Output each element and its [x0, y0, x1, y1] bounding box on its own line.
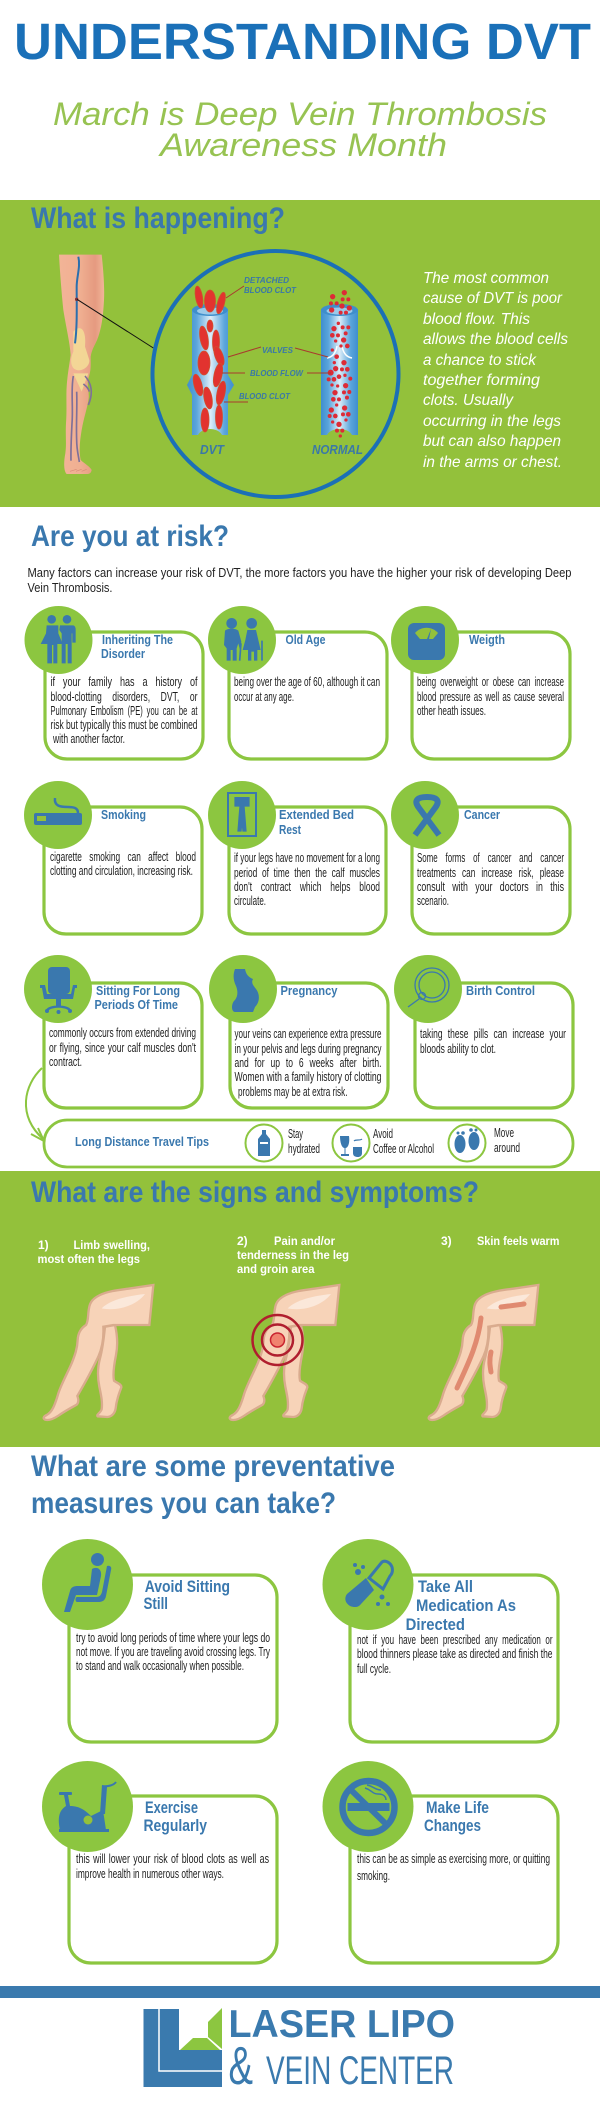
body text: smoking. — [357, 1869, 390, 1883]
icon: pill pack — [408, 968, 449, 1007]
card: birth control — [394, 955, 573, 1108]
body text: full cycle. — [357, 1662, 391, 1676]
body text: occur at any age. — [234, 690, 294, 704]
tip: move around: Move — [494, 1126, 514, 1140]
body text — [234, 851, 380, 908]
tip: move around — [448, 1124, 520, 1162]
body text: in your pelvis and legs during pregnancy — [234, 1042, 382, 1056]
body text: to stand and walk occasionally when possible. — [76, 1659, 244, 1673]
card: extended bed rest — [208, 781, 386, 934]
title: UNDERSTANDING DVT — [14, 13, 591, 70]
body text: Women with a family history of clotting — [234, 1070, 382, 1084]
explanation text: clots. Usually — [423, 392, 514, 409]
symptom 1 label: 1) — [38, 1238, 49, 1252]
arrow: curve to travel tips — [26, 1068, 44, 1141]
body text: bloods ability to clot. — [420, 1042, 496, 1056]
title: Still — [144, 1594, 168, 1613]
tip: stay hydrated — [246, 1124, 320, 1162]
symptom 1 label: most often the legs — [38, 1252, 140, 1266]
body text: being over the age of 60, although it can — [234, 675, 380, 689]
body text: risk but typically this must be combined — [50, 718, 198, 732]
icon: bed rest — [228, 793, 256, 836]
symptom 1 label: Limb swelling, — [74, 1238, 150, 1252]
body text — [417, 675, 564, 718]
title: Take All — [418, 1577, 473, 1596]
vein: DVT — [187, 286, 234, 435]
logo text — [228, 2003, 455, 2096]
body text: your veins can experience extra pressure — [234, 1027, 382, 1041]
title — [424, 1798, 489, 1835]
title: Old Age — [286, 632, 326, 647]
diagram labels: NORMAL — [312, 442, 363, 457]
title: Sitting For Long — [96, 983, 180, 998]
illustration: swollen leg — [44, 1285, 153, 1420]
title: Changes — [424, 1816, 481, 1835]
diagram labels — [200, 275, 363, 457]
icon: couple — [41, 615, 76, 663]
symptom 3 label: 3) — [441, 1234, 452, 1248]
card: make life changes — [322, 1761, 558, 1963]
body text — [76, 1852, 269, 1881]
title: Rest — [279, 822, 302, 837]
body text — [357, 1633, 553, 1676]
body text: improve health in numerous other ways. — [76, 1867, 224, 1881]
logo text: & — [228, 2036, 253, 2096]
diagram labels: DVT — [200, 442, 225, 457]
card: pregnancy — [209, 955, 388, 1108]
explanation text: allows the blood cells — [423, 331, 568, 348]
title: Extended Bed — [279, 807, 354, 822]
title — [144, 1577, 230, 1613]
heading: preventative measures: What are some preventative — [31, 1450, 395, 1483]
symptom 2 label: Pain and/or — [274, 1234, 335, 1248]
body text: this will lower your risk of blood clots as well as — [76, 1852, 269, 1866]
intro text: Vein Thrombosis. — [28, 581, 112, 595]
body text — [49, 1026, 196, 1069]
icon: ribbon — [415, 797, 439, 835]
body text: commonly occurs from extended driving — [49, 1026, 196, 1040]
panel: what is happening — [0, 200, 600, 507]
explanation text: together forming — [423, 372, 540, 389]
title — [94, 983, 180, 1012]
title — [144, 1798, 207, 1835]
icon: pregnant silhouette — [232, 969, 259, 1012]
tip: stay hydrated: Stay — [288, 1127, 303, 1141]
leg illustration — [59, 255, 153, 474]
panel: signs and symptoms — [0, 1171, 600, 1447]
icon: capsule — [345, 1561, 392, 1607]
body text: or flying, since your calf muscles don't — [49, 1041, 196, 1055]
title — [406, 1577, 516, 1634]
body text — [50, 850, 196, 878]
body text: if your legs have no movement for a long — [234, 851, 380, 865]
body text — [234, 675, 380, 704]
body text: don't contract which helps blood — [234, 880, 380, 894]
title: Smoking — [101, 807, 146, 822]
icon: scale — [408, 623, 445, 660]
body text — [420, 1027, 566, 1056]
icon: exercise bike — [59, 1782, 116, 1832]
panel: long distance travel tips — [44, 1120, 573, 1167]
logo text: VEIN CENTER — [266, 2049, 454, 2093]
title: Periods Of Time — [94, 997, 178, 1012]
subtitle: Awareness Month — [158, 127, 447, 163]
body text — [234, 1027, 382, 1099]
body text — [76, 1631, 270, 1673]
tip: move around: around — [494, 1141, 520, 1155]
body text: contract. — [49, 1055, 82, 1069]
symptom 3 label: Skin feels warm — [477, 1234, 560, 1248]
body text: if your family has a history of — [50, 675, 198, 689]
body text: blood-clotting disorders, DVT, or — [50, 690, 198, 704]
icon: seated person — [64, 1553, 111, 1612]
title: Inheriting The — [102, 632, 173, 647]
body text: cigarette smoking can affect blood — [50, 850, 196, 864]
title — [101, 632, 173, 661]
explanation text: The most common — [423, 270, 549, 287]
title: Avoid Sitting — [145, 1577, 230, 1596]
card: weight — [391, 606, 570, 759]
heading: signs and symptoms: What are the signs and symptoms? — [31, 1176, 479, 1209]
symptom 1 label — [38, 1238, 150, 1266]
illustration: painful leg with target — [230, 1285, 339, 1420]
body text: and for up to 6 weeks after birth. — [234, 1056, 382, 1070]
tip: avoid coffee or alcohol: Coffee or Alcohol — [373, 1142, 434, 1156]
explanation text — [423, 270, 568, 471]
illustration: warm skin leg — [429, 1285, 538, 1420]
body text: circulate. — [234, 894, 266, 908]
card: old age — [208, 606, 387, 759]
magnified circle with veins — [152, 251, 398, 497]
heading: preventative measures: measures you can take? — [31, 1487, 336, 1520]
body text: problems may be at extra risk. — [238, 1085, 348, 1099]
logo: laser lipo and vein center — [144, 2003, 455, 2096]
heading: preventative measures — [31, 1450, 395, 1520]
tip: stay hydrated: hydrated — [288, 1142, 320, 1156]
explanation text: occurring in the legs — [423, 413, 561, 430]
intro text — [28, 566, 572, 595]
vein: normal — [321, 290, 358, 438]
symptom 2 label — [237, 1234, 349, 1276]
body text: period of time then the calf muscles — [234, 866, 380, 880]
body text: clotting and circulation, increasing risk. — [50, 864, 193, 878]
body text: not move. If you are traveling avoid crossing legs. Try — [76, 1645, 270, 1659]
body text: with another factor. — [52, 732, 125, 746]
explanation text: in the arms or chest. — [423, 454, 562, 471]
title: Regularly — [144, 1816, 207, 1835]
title: Medication As — [416, 1596, 516, 1615]
heading: what is happening: What is happening? — [31, 202, 285, 235]
title: Directed — [406, 1615, 465, 1634]
subtitle — [53, 96, 547, 163]
title: Birth Control — [466, 983, 535, 998]
explanation text: but can also happen — [423, 433, 561, 450]
explanation text: cause of DVT is poor — [423, 290, 563, 307]
card: smoking — [24, 781, 202, 934]
title: Make Life — [426, 1798, 489, 1817]
heading: are you at risk: Are you at risk? — [31, 520, 229, 553]
diagram labels: BLOOD CLOT — [239, 391, 291, 401]
logo mark — [144, 2008, 222, 2087]
body text: scenario. — [417, 894, 449, 908]
title: Exercise — [145, 1798, 198, 1817]
card: take all medication — [322, 1539, 558, 1742]
explanation text: blood flow. This — [423, 311, 530, 328]
icon: elderly couple — [224, 618, 262, 661]
title — [279, 807, 354, 837]
title: Pregnancy — [280, 983, 338, 998]
symptom 3 label — [441, 1234, 560, 1248]
title: Disorder — [101, 646, 145, 661]
card: avoid sitting still — [42, 1539, 277, 1742]
tip: avoid coffee or alcohol — [332, 1124, 434, 1162]
body text: try to avoid long periods of time where your legs do — [76, 1631, 270, 1645]
diagram labels: BLOOD FLOW — [250, 368, 304, 378]
card: exercise regularly — [42, 1761, 277, 1963]
card: sitting for long periods — [24, 955, 202, 1108]
logo text: LASER LIPO — [228, 2003, 455, 2046]
symptom 2 label: and groin area — [237, 1262, 315, 1276]
body text — [50, 675, 198, 746]
explanation text: a chance to stick — [423, 352, 537, 369]
icon: cigarette — [34, 798, 82, 825]
symptom 2 label: 2) — [237, 1234, 248, 1248]
body text — [417, 851, 564, 908]
card: cancer — [391, 781, 570, 934]
card: inheriting the disorder — [24, 606, 203, 759]
icon: no smoking — [342, 1781, 394, 1833]
icon: office chair — [40, 967, 77, 1014]
diagram leader lines — [222, 286, 331, 402]
body text: other heath issues. — [417, 704, 486, 718]
diagram labels: BLOOD CLOT — [244, 285, 297, 295]
body text — [357, 1852, 550, 1883]
symptom 2 label: tenderness in the leg — [237, 1248, 349, 1262]
tip: avoid coffee or alcohol: Avoid — [373, 1127, 393, 1141]
diagram labels: VALVES — [262, 345, 293, 355]
title: Weigth — [469, 632, 505, 647]
body text: Pulmonary Embolism (PE) you can be at — [50, 704, 198, 718]
tips heading: Long Distance Travel Tips — [75, 1134, 209, 1149]
subtitle: March is Deep Vein Thrombosis — [53, 96, 547, 132]
footer band — [0, 1986, 600, 1998]
diagram labels: DETACHED — [244, 275, 289, 285]
title: Cancer — [464, 807, 500, 822]
